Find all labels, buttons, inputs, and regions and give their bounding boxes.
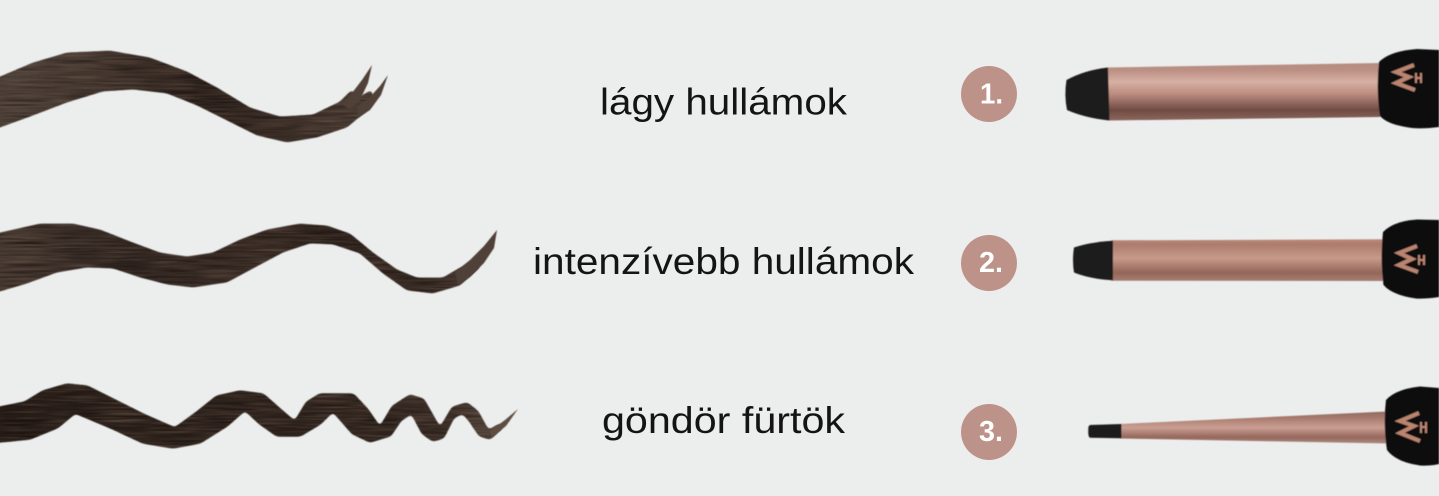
- hair strand 1: soft waves: [0, 51, 388, 142]
- logo 1: [1396, 65, 1421, 90]
- label: more intense waves: intenzívebb hullámok: [533, 241, 915, 282]
- tip 3: [1088, 424, 1122, 438]
- handle 3: [1385, 386, 1439, 466]
- handle 2: [1382, 220, 1439, 299]
- label: soft waves: lágy hullámok: [600, 81, 848, 122]
- curling iron 1: [1065, 49, 1439, 128]
- badge 1: [961, 66, 1017, 122]
- badge 2: 2.: [979, 247, 1003, 279]
- barrel 1: [1106, 63, 1380, 120]
- curling iron 3: [1088, 386, 1439, 466]
- badge 1: 1.: [980, 78, 1003, 110]
- logo 3: [1400, 413, 1426, 441]
- hair strand 2: more intense waves: [0, 224, 497, 294]
- barrel 3: [1120, 412, 1387, 444]
- logo 2: [1399, 246, 1424, 272]
- badge 3: 3.: [979, 416, 1003, 448]
- tip 1: [1065, 68, 1110, 120]
- badge 3: [961, 404, 1017, 460]
- tip 2: [1073, 241, 1113, 280]
- barrel 2: [1111, 239, 1384, 281]
- curling iron 2: [1073, 220, 1439, 299]
- label: curls: göndör fürtök: [602, 400, 846, 441]
- hair strand 3: tight curls: [0, 385, 518, 447]
- badge 2: [961, 235, 1017, 291]
- handle 1: [1378, 49, 1439, 128]
